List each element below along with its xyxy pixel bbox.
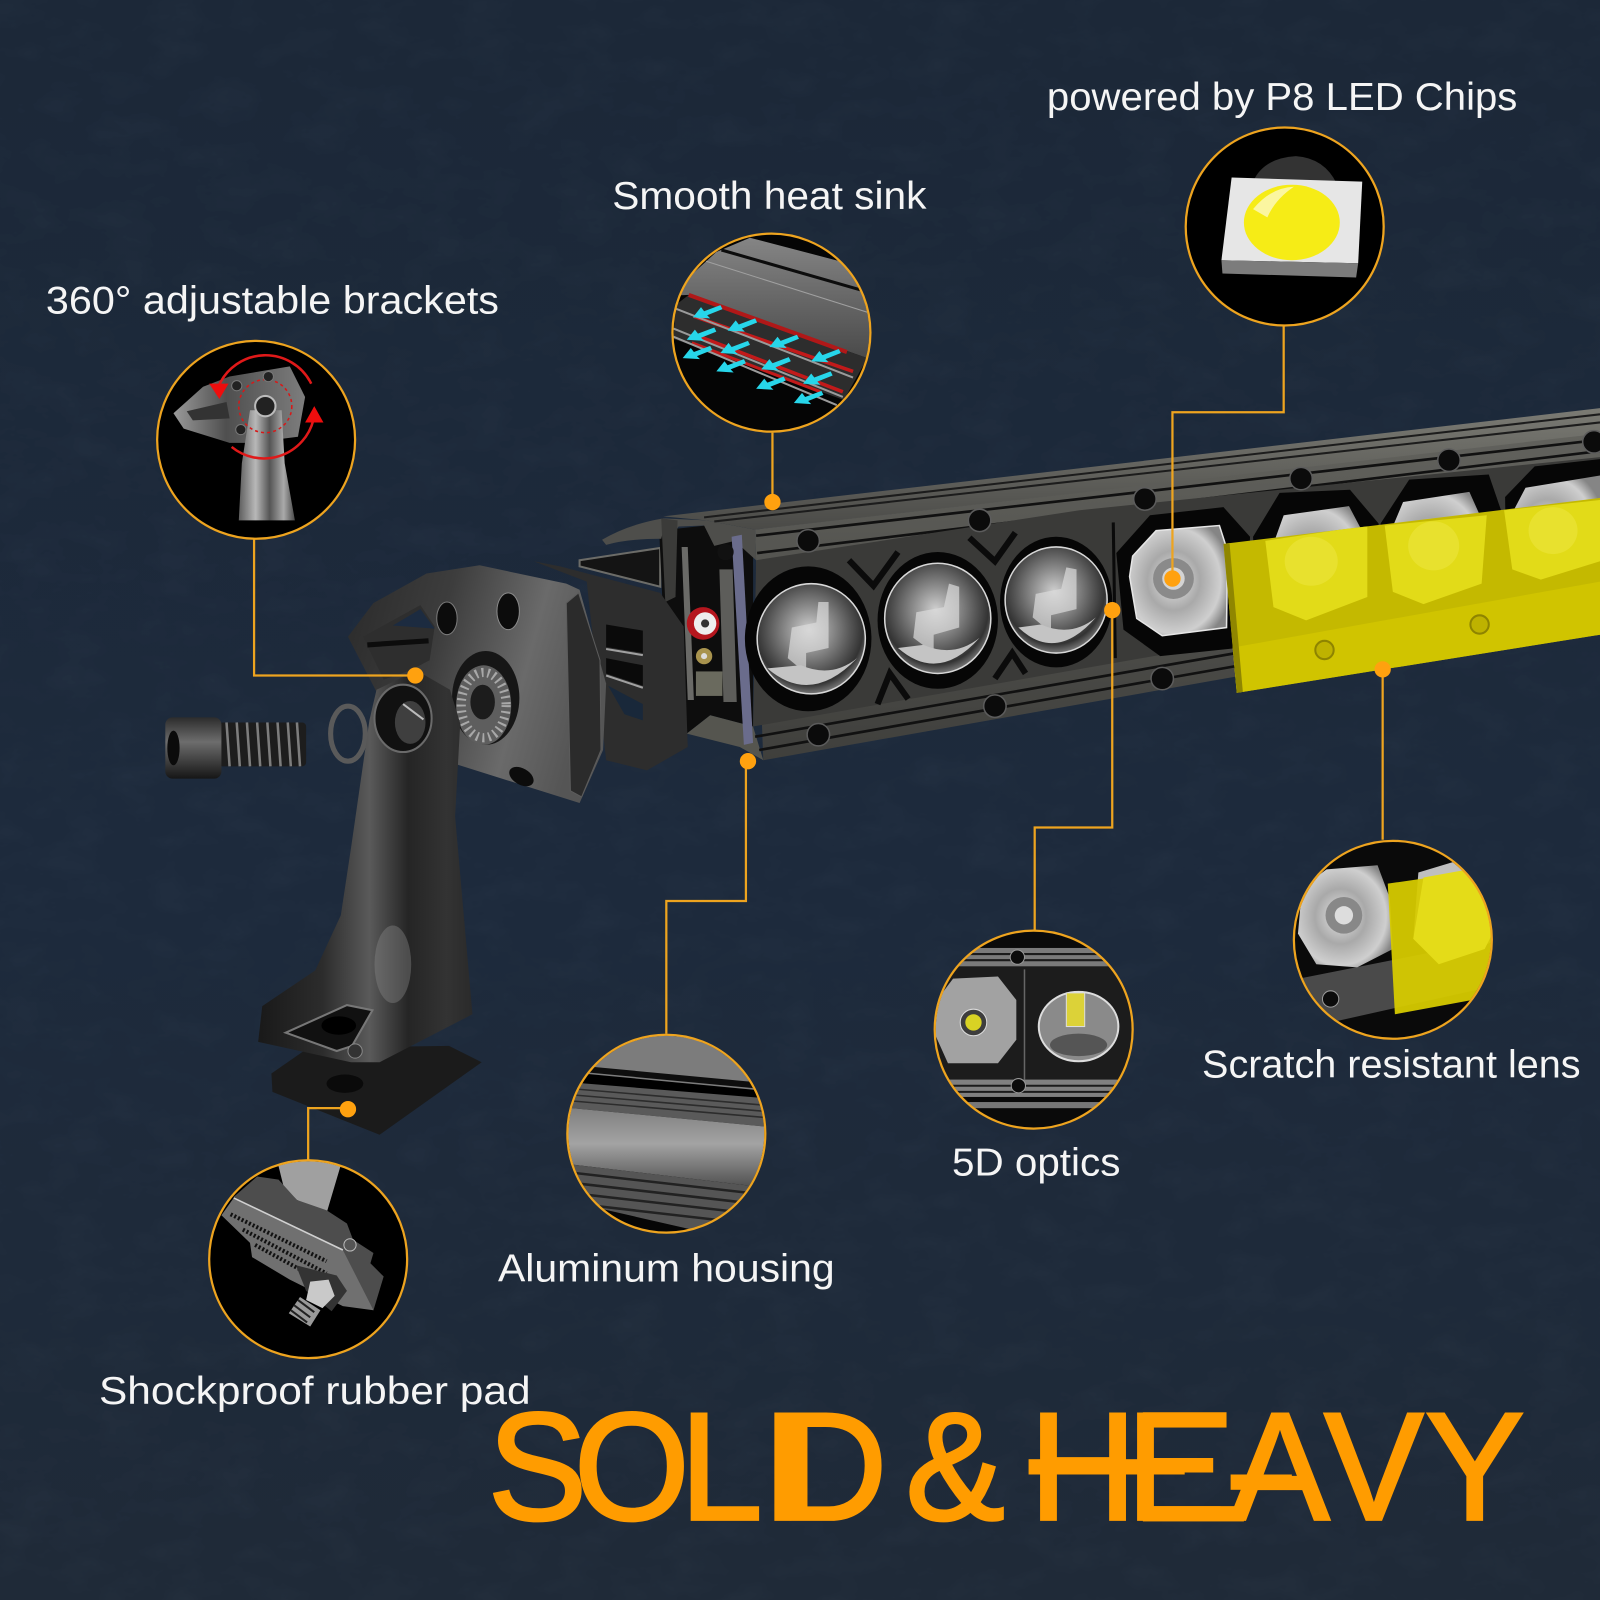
callout: shockproof rubber pad <box>209 1158 407 1358</box>
label: 5D optics: 5D optics <box>952 1142 1120 1185</box>
callout: P8 LED chip <box>1186 128 1384 326</box>
mount plate <box>348 565 606 803</box>
label: powered by P8 LED Chips: powered by P8 LED Chips <box>1047 76 1517 119</box>
leader dots <box>340 494 1391 1117</box>
end bolt <box>717 544 734 560</box>
plate openings <box>363 593 537 790</box>
lens housings <box>745 459 1600 711</box>
yellow lens cover <box>1224 498 1600 693</box>
callout: aluminum housing <box>566 1034 766 1234</box>
inner column <box>719 569 737 702</box>
rear fins <box>580 548 660 587</box>
inner panel edge <box>682 547 694 700</box>
lens divider <box>1113 522 1115 658</box>
callout: scratch resistant lens <box>1294 841 1500 1039</box>
spine <box>661 518 678 602</box>
callout: smooth heat sink <box>668 234 878 432</box>
rear frame <box>534 561 688 770</box>
lens highlights <box>1285 507 1578 586</box>
hood <box>602 518 756 560</box>
face <box>753 457 1600 727</box>
bottom corner <box>687 715 763 760</box>
lens 1 <box>757 584 865 694</box>
label: Shockproof rubber pad: Shockproof rubber pad <box>99 1370 531 1413</box>
arm eye <box>374 685 432 752</box>
callout: 360 adjustable brackets <box>157 341 355 539</box>
callout: 5D optics <box>929 931 1143 1129</box>
front rails <box>755 434 1600 760</box>
lens 2 <box>885 563 991 673</box>
end terminals <box>687 607 722 696</box>
top surface <box>663 408 1600 530</box>
rubber pad <box>271 1046 482 1135</box>
V marks <box>849 533 1026 704</box>
label: 360 adjustable brackets: 360° adjustable brackets <box>46 279 499 322</box>
arm foot <box>286 1005 372 1058</box>
screws <box>797 431 1600 746</box>
lens 3 <box>1005 547 1107 653</box>
rail grooves <box>755 440 1600 750</box>
plate side edge <box>566 593 601 797</box>
spring washer <box>331 706 365 761</box>
arm highlight <box>374 926 411 1003</box>
mounting bracket <box>165 561 688 1135</box>
toothed washer <box>452 651 519 745</box>
label: Smooth heat sink: Smooth heat sink <box>612 175 927 218</box>
label: Aluminum housing: Aluminum housing <box>498 1248 835 1291</box>
bolt <box>165 717 306 779</box>
title: SOLID & HEAVY: SOLID & HEAVY <box>488 1381 1524 1552</box>
lens 4 clear optic <box>1130 526 1228 636</box>
arm <box>258 670 472 1062</box>
light bar <box>580 408 1600 760</box>
end cap body <box>659 526 753 734</box>
tinted lenses <box>1265 500 1600 620</box>
frame slats <box>606 624 643 720</box>
end strip <box>732 535 753 745</box>
lenses 5 to 7 <box>1265 476 1600 620</box>
cover rail tint <box>1231 582 1600 704</box>
cover left edge <box>1223 544 1243 693</box>
top grooves <box>704 414 1600 521</box>
label: Scratch resistant lens: Scratch resistant lens <box>1202 1044 1581 1087</box>
leader lines <box>254 327 1383 1160</box>
